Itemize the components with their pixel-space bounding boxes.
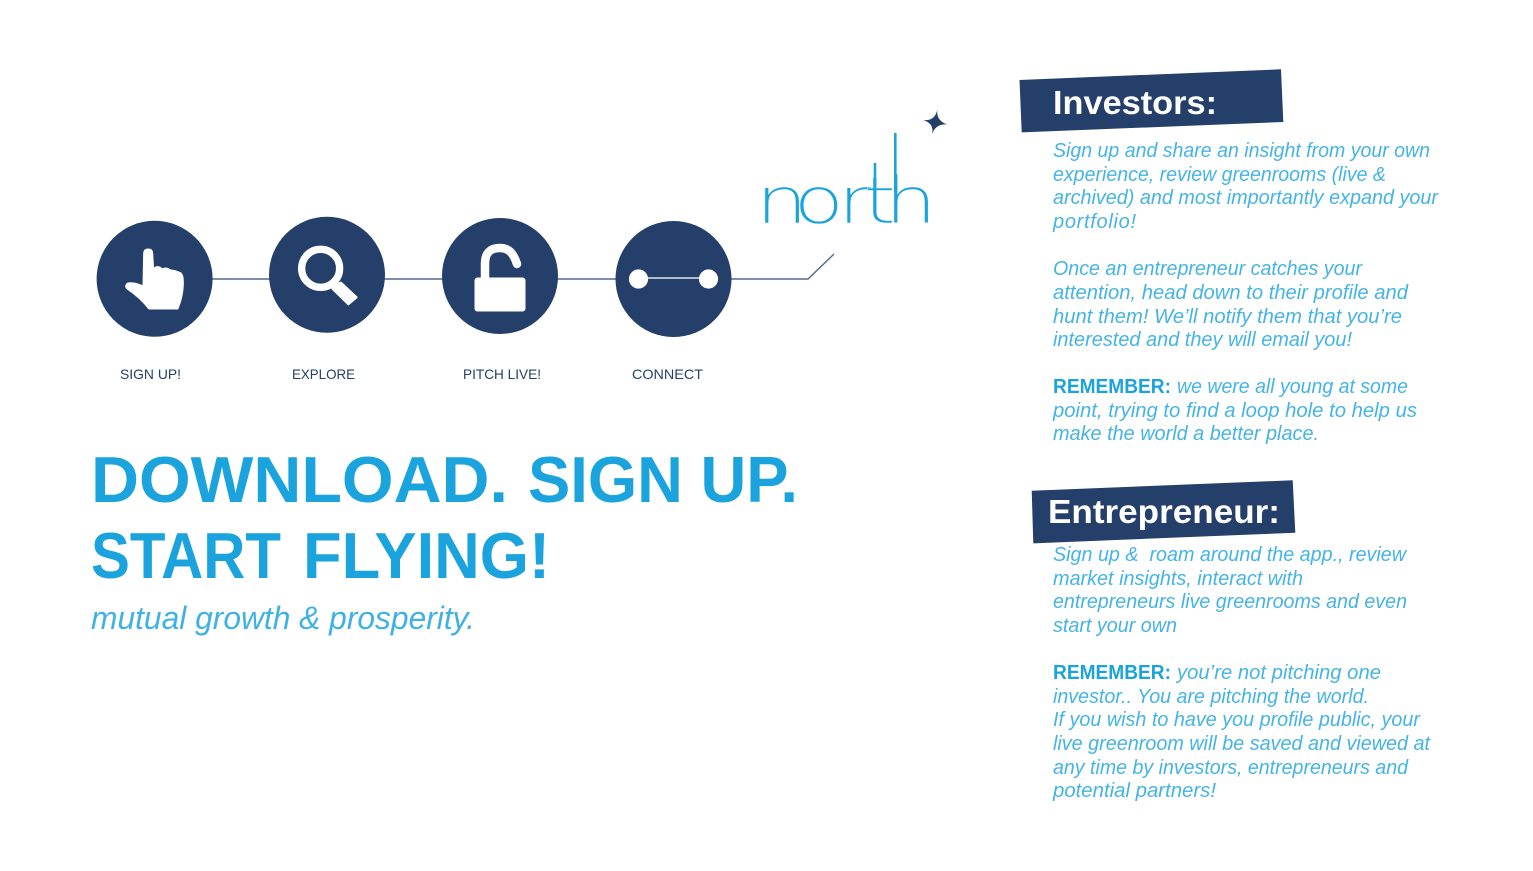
- text block: investors advice: hunt them! We’ll notify them that you’re: [1053, 306, 1402, 328]
- banner: investors: Investors:: [1053, 84, 1217, 121]
- tagline: mutual growth & prosperity.: [91, 600, 475, 636]
- icon: sign up hand: [97, 221, 213, 337]
- step label: connect: CONNECT: [632, 366, 703, 382]
- step label: explore: EXPLORE: [292, 366, 355, 382]
- banner: entrepreneur: [1032, 480, 1295, 543]
- icon: connect two linked dots: [616, 221, 732, 337]
- headline line 1: DOWNLOAD.: [91, 443, 508, 516]
- text block: entrepreneur advice: If you wish to have you profile public, your: [1053, 709, 1421, 731]
- icon: pitch live unlocked padlock: [442, 218, 558, 334]
- headline line 1: [91, 443, 798, 516]
- icon: explore magnifier: [269, 217, 385, 333]
- banner: entrepreneur: Entrepreneur:: [1048, 493, 1280, 530]
- text block: entrepreneur advice: potential partners!: [1052, 780, 1216, 802]
- text block: investors advice: experience, review greenrooms (live &: [1053, 164, 1386, 186]
- text block: investors advice: point, trying to find a loop hole to help us: [1052, 400, 1417, 422]
- text block: entrepreneur advice: live greenroom will be saved and viewed at: [1053, 733, 1431, 755]
- text block: investors advice: Once an entrepreneur catches your: [1053, 258, 1363, 280]
- step label: pitch live: PITCH LIVE!: [463, 366, 541, 382]
- text block: entrepreneur advice: [1052, 544, 1431, 802]
- text block: entrepreneur advice: any time by investors, entrepreneurs and: [1053, 757, 1409, 779]
- text block: investors advice: interested and they will email you!: [1053, 329, 1352, 351]
- headline line 1: SIGN UP.: [528, 443, 798, 516]
- banner: investors: [1020, 69, 1283, 132]
- text block: entrepreneur advice: investor.. You are pitching the world.: [1053, 686, 1369, 708]
- process flow: connector line: [154, 254, 834, 279]
- text block: investors advice: Sign up and share an insight from your own: [1053, 140, 1430, 162]
- text block: investors advice: attention, head down to their profile and: [1053, 282, 1409, 304]
- text block: investors advice: make the world a better place.: [1053, 423, 1319, 445]
- text block: investors advice: we were all young at some: [1177, 376, 1408, 398]
- text block: entrepreneur advice: you’re not pitching one: [1175, 662, 1381, 684]
- logo: north wordmark: north: [756, 164, 937, 239]
- text block: investors advice: REMEMBER:: [1053, 376, 1171, 398]
- text block: investors advice: [1052, 140, 1439, 445]
- text block: entrepreneur advice: start your own: [1053, 615, 1177, 637]
- text block: investors advice: archived) and most importantly expand your: [1053, 187, 1439, 209]
- text block: entrepreneur advice: REMEMBER:: [1053, 662, 1171, 684]
- headline line 2: START: [91, 519, 281, 592]
- icon: north star: [923, 109, 947, 134]
- text block: entrepreneur advice: entrepreneurs live greenrooms and even: [1053, 591, 1407, 613]
- text block: entrepreneur advice: Sign up & roam around the app., review: [1053, 544, 1408, 566]
- text block: entrepreneur advice: market insights, interact with: [1053, 568, 1303, 590]
- headline line 2: [91, 519, 550, 592]
- headline line 2: FLYING!: [303, 519, 550, 592]
- step label: sign up: SIGN UP!: [120, 366, 181, 382]
- text block: investors advice: portfolio!: [1052, 211, 1136, 233]
